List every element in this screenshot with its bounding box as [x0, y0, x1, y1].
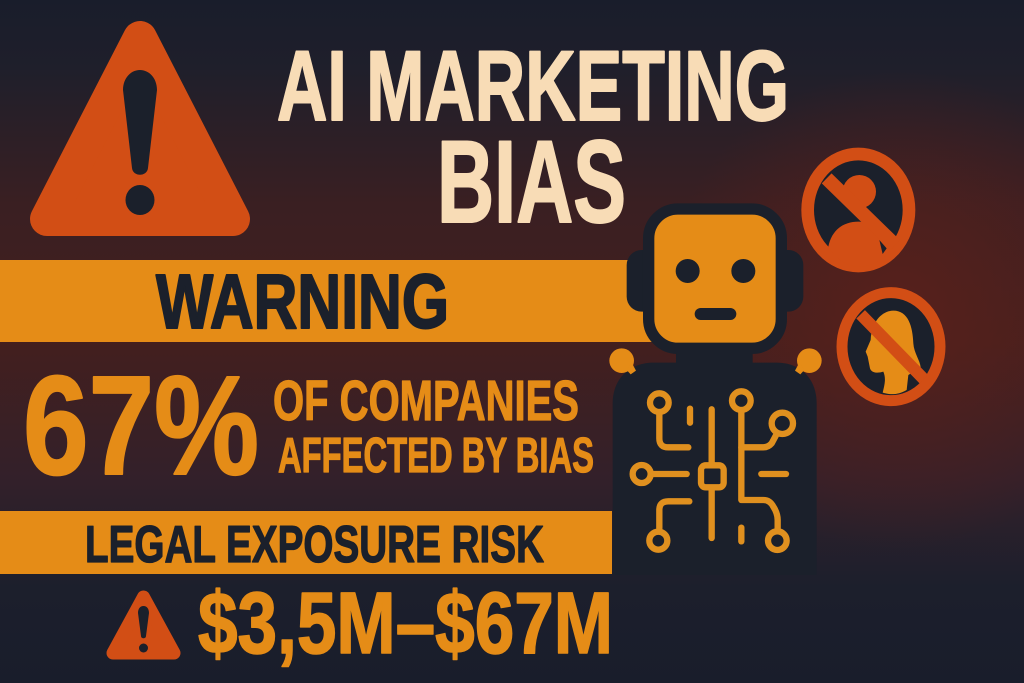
icon: large warning triangle	[47, 38, 233, 219]
icon: prohibited woman profile	[842, 293, 940, 401]
warning banner	[0, 259, 660, 345]
robot head	[649, 209, 781, 348]
statistic: 67 percent of companies: 67%	[23, 346, 259, 504]
icon: small warning triangle	[113, 597, 174, 653]
statistic: 67 percent of companies: OF COMPANIES	[273, 369, 579, 433]
title	[277, 30, 789, 247]
title: AI MARKETING	[277, 30, 789, 141]
robot circuit board	[633, 391, 793, 550]
icon: robot	[609, 209, 822, 575]
title: BIAS	[437, 116, 626, 247]
robot ears	[627, 250, 803, 312]
warning banner: WARNING	[156, 259, 449, 345]
icon: prohibited person	[808, 154, 909, 267]
legal exposure banner	[0, 511, 612, 574]
statistic: 67 percent of companies: AFFECTED BY BIAS	[278, 429, 594, 483]
legal exposure amount: $3,5M–$67M	[198, 575, 613, 672]
statistic: 67 percent of companies	[23, 346, 594, 504]
robot antennas	[609, 348, 822, 374]
legal exposure banner: LEGAL EXPOSURE RISK	[85, 516, 544, 574]
robot body	[613, 343, 817, 575]
